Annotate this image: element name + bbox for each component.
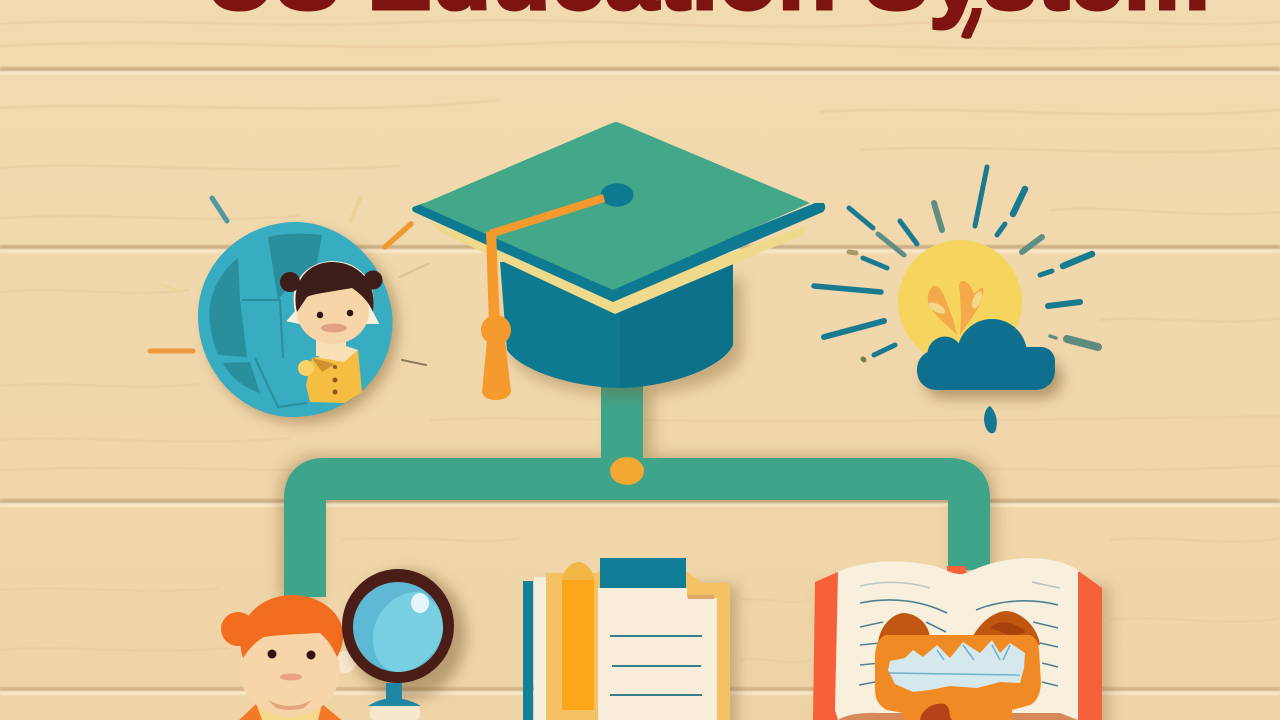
clipboard with notes [523,558,738,720]
cap top [420,122,810,290]
girl character [280,262,382,403]
book pages [835,558,1078,720]
sun and cloud [898,240,1062,433]
flowchart connector [300,385,974,600]
mascot face [875,635,1041,720]
teal brim layer [412,203,825,302]
mascot teeth [888,640,1025,692]
cloud [917,319,1055,390]
yellow brim layer [428,220,808,314]
tassel [481,183,634,400]
rain drop [984,406,997,433]
open book with mascot [813,558,1110,720]
sun rays [814,167,1098,360]
cap body [500,258,733,388]
magnifying glass [342,569,466,720]
sparkle rays around globe [150,198,428,365]
sun [898,240,1022,364]
connector node [610,457,644,485]
paper sheet [598,588,717,720]
leaf sprout [927,281,984,335]
globe with girl [198,222,398,423]
graduation cap [412,122,825,400]
lower mouth mark [920,704,952,720]
mascot ears [878,613,930,643]
girl with orange hair [221,595,356,720]
note lines [610,635,702,696]
